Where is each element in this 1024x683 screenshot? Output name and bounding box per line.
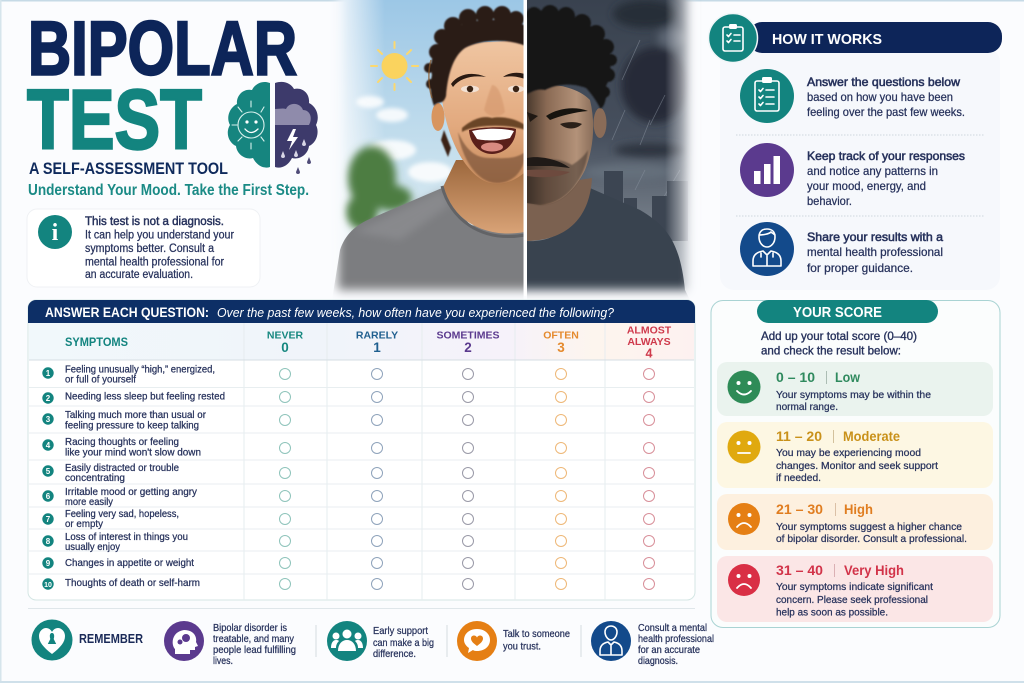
tip: consult professional: [591, 621, 714, 667]
symptom statements: more easily: [65, 497, 113, 508]
score card: very high: concern. Please seek professional: [776, 594, 928, 606]
step 3: Share your results with a: [807, 230, 943, 244]
title: [27, 6, 297, 166]
question number badges: 2: [46, 394, 51, 403]
tip: treatable: treatable, and many: [213, 633, 295, 645]
panel: how it works: [708, 14, 1002, 290]
column headers: 4: [646, 346, 653, 360]
column headers: 0: [281, 340, 289, 355]
callout: not a diagnosis: symptoms better. Consult a: [85, 243, 215, 255]
symptom statements: Easily distracted or trouble: [65, 463, 179, 474]
subtitle: [28, 160, 309, 199]
score card: high: 21 – 30: [776, 502, 823, 517]
panel: how it works: HOW IT WORKS: [772, 32, 882, 48]
panel: question table: ANSWER EACH QUESTION:: [45, 305, 209, 320]
score card: very high: Your symptoms indicate significant: [776, 581, 933, 593]
column headers: NEVER: [267, 330, 303, 342]
score card: high: of bipolar disorder. Consult a professional.: [776, 533, 967, 545]
column headers: SYMPTOMS: [65, 335, 128, 349]
score card: moderate: You may be experiencing mood: [776, 447, 921, 459]
icon: half sunny half stormy brain: [228, 82, 318, 174]
column headers: SOMETIMES: [436, 330, 500, 342]
symptom statements: Feeling unusually “high,” energized,: [65, 364, 215, 376]
score card: very high: help as soon as possible.: [776, 606, 888, 618]
tip: early support: [327, 621, 434, 661]
column headers: 1: [373, 340, 381, 355]
icon: clipboard header: [708, 14, 758, 62]
score card: low: Your symptoms may be within the: [776, 389, 931, 401]
score card: very high: [717, 556, 993, 622]
callout: not a diagnosis: mental health professional for: [85, 256, 224, 268]
panel: question table: [28, 300, 695, 600]
symptom statements: Thoughts of death or self-harm: [65, 578, 200, 589]
symptom statements: Irritable mood or getting angry: [65, 487, 197, 498]
panel: your score: and check the result below:: [761, 344, 901, 358]
score card: very high: 31 – 40: [776, 563, 823, 578]
tip: consult professional: diagnosis.: [638, 655, 678, 667]
symptom statements: like your mind won't slow down: [65, 448, 201, 458]
symptom statements: or empty: [65, 519, 103, 530]
callout: not a diagnosis: It can help you understand your: [85, 230, 234, 242]
subtitle: Understand Your Mood. Take the First Step.: [28, 182, 309, 199]
symptom statements: Racing thoughts or feeling: [65, 437, 179, 448]
tip: talk to someone: Talk to someone: [503, 628, 570, 640]
tip: consult professional: Consult a mental: [638, 622, 707, 634]
title: BIPOLAR: [28, 6, 297, 92]
score card: high: [717, 494, 993, 550]
column headers: OFTEN: [543, 330, 579, 342]
symptom statements: Talking much more than usual or: [65, 410, 207, 421]
column headers: 3: [557, 340, 565, 355]
step 1: based on how you have been: [807, 90, 953, 104]
score card: moderate: 11 – 20: [776, 429, 822, 444]
score card: high: Your symptoms suggest a higher chance: [776, 521, 962, 533]
callout: not a diagnosis: [27, 209, 260, 287]
score card: moderate: if needed.: [776, 472, 821, 484]
panel: your score: Add up your total score (0–40): [761, 329, 917, 343]
score card: moderate: [717, 422, 993, 488]
question number badges: 7: [46, 515, 51, 524]
symptom statements: or full of yourself: [65, 374, 136, 386]
score card: moderate: Moderate: [843, 429, 900, 444]
step 2: and notice any patterns in: [807, 164, 938, 178]
column headers: ALWAYS: [627, 336, 671, 348]
answer circles: often: [556, 368, 566, 590]
column headers: RARELY: [356, 330, 398, 342]
step 2: [740, 143, 965, 208]
question number badges: 4: [46, 441, 51, 450]
step 2: your mood, energy, and: [807, 179, 926, 193]
question number badges: 6: [46, 492, 51, 501]
score card: very high: Very High: [844, 563, 904, 578]
answer circles: rarely: [372, 368, 382, 590]
column headers: 2: [464, 340, 472, 355]
question number badges: 5: [46, 467, 51, 476]
tip: talk to someone: you trust.: [503, 640, 541, 652]
question number badges: 9: [46, 559, 51, 568]
step 2: behavior.: [807, 194, 852, 208]
step 3: for proper guidance.: [807, 261, 913, 275]
step 3: [740, 222, 943, 276]
callout: not a diagnosis: This test is not a diagnosis.: [85, 216, 224, 228]
symptom statements: Loss of interest in things you: [65, 532, 188, 543]
symptom statements: Changes in appetite or weight: [65, 558, 194, 569]
panel: your score: [711, 300, 1000, 628]
answer circles: never: [280, 368, 290, 590]
tip: early support: difference.: [373, 648, 416, 660]
panel: question table: Over the past few weeks, how often have you experienced the following?: [217, 306, 614, 320]
symptom statements: Needing less sleep but feeling rested: [65, 392, 225, 402]
score card: high: High: [844, 502, 873, 517]
answer circles: sometimes: [462, 368, 474, 590]
subtitle: A SELF-ASSESSMENT TOOL: [29, 160, 228, 178]
step 1: Answer the questions below: [807, 75, 960, 89]
tip: talk to someone: [457, 621, 570, 661]
question number badges: 10: [44, 582, 52, 589]
tip: treatable: lives.: [213, 655, 233, 667]
symptom statements: [65, 364, 225, 589]
icon: heart: [32, 620, 72, 660]
panel: remember footer: REMEMBER: [79, 632, 143, 646]
symptom statements: Feeling very sad, hopeless,: [65, 509, 179, 520]
question number badges: 1: [46, 369, 51, 378]
score card: low: [717, 362, 993, 416]
column headers: ALMOST: [627, 324, 672, 336]
column headers: [65, 324, 672, 360]
title: TEST: [27, 72, 202, 166]
answer circles: almost always: [644, 368, 654, 590]
question number badges: 8: [46, 537, 51, 546]
symptom statements: usually enjoy: [65, 542, 120, 553]
tip: consult professional: for an accurate: [638, 644, 700, 656]
symptom statements: concentrating: [65, 473, 125, 484]
step 1: [740, 69, 965, 123]
callout: not a diagnosis: i: [52, 220, 59, 246]
tip: early support: Early support: [373, 625, 428, 637]
portrait divider: [524, 0, 526, 296]
step 2: Keep track of your responses: [807, 149, 965, 163]
panel: remember footer: [28, 608, 714, 667]
question number badges: 3: [46, 415, 51, 424]
tip: treatable: [164, 621, 296, 667]
callout: not a diagnosis: an accurate evaluation.: [85, 269, 193, 281]
tip: treatable: Bipolar disorder is: [213, 622, 287, 634]
score card: moderate: changes. Monitor and seek support: [776, 460, 938, 472]
step 1: feeling over the past few weeks.: [807, 105, 965, 119]
score card: low: Low: [835, 370, 860, 385]
panel: your score: YOUR SCORE: [793, 305, 882, 321]
tip: treatable: people lead fulfilling: [213, 644, 296, 656]
step 3: mental health professional: [807, 245, 943, 259]
score card: low: 0 – 10: [776, 370, 815, 385]
split portrait: happy and sad: [320, 0, 707, 300]
tip: consult professional: health professional: [638, 633, 714, 645]
tip: early support: can make a big: [373, 637, 434, 649]
symptom statements: feeling pressure to keep talking: [65, 420, 199, 432]
question number badges: [42, 367, 54, 590]
score card: low: normal range.: [776, 401, 838, 413]
